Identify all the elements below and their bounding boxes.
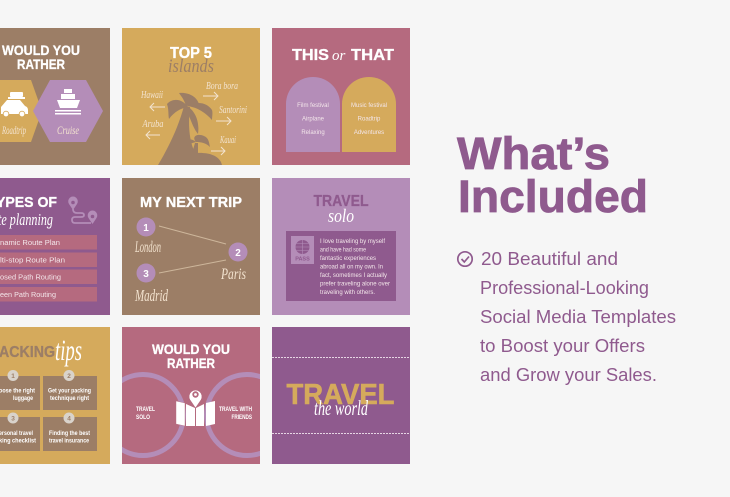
text box <box>286 231 396 301</box>
tip text: ersonal travel <box>0 431 33 437</box>
label: travel with friends: TRAVEL WITH <box>219 407 252 413</box>
labels: islands with arrows: Hawaii <box>140 90 163 101</box>
heading: would you rather: RATHER <box>167 356 215 371</box>
arch: this <box>286 77 340 152</box>
body text: and have had some <box>320 246 366 254</box>
icon: route pins <box>68 197 97 224</box>
heading: packing: ACKING <box>0 344 55 361</box>
panel: types of route planning <box>0 178 110 315</box>
tip numbers: 4 <box>67 416 71 422</box>
labels: islands with arrows: Kauai <box>219 135 236 146</box>
label: roadtrip: Roadtrip <box>1 123 26 137</box>
icon: passport: PASS <box>295 256 310 262</box>
list: that: Music festival <box>351 103 387 109</box>
label: london: London <box>134 239 161 256</box>
arch: that <box>342 77 396 152</box>
heading: what's included <box>457 128 648 222</box>
tip numbers: 3 <box>11 416 15 422</box>
heading: would you rather: WOULD YOU <box>152 342 230 357</box>
heading: would you rather <box>2 43 80 72</box>
text block: description: to Boost your Offers <box>480 336 645 356</box>
labels: islands with arrows: Aruba <box>142 119 164 130</box>
panel: this or that <box>272 28 410 165</box>
body text: traveling with others. <box>320 289 375 296</box>
list: route plans: osed Path Routing <box>0 274 61 282</box>
list: route plans: lti-stop Route Plan <box>0 258 65 264</box>
text block: description <box>480 249 676 385</box>
text block: description: Social Media Templates <box>480 307 676 327</box>
heading: my next trip: MY NEXT TRIP <box>140 194 242 211</box>
heading: travel: TRAVEL <box>286 379 394 411</box>
rings <box>122 372 260 458</box>
text block: description: 20 Beautiful and <box>481 249 618 269</box>
list: that: Adventures <box>354 130 384 136</box>
panel: my next trip <box>122 178 260 315</box>
label: madrid: Madrid <box>134 286 168 305</box>
heading: top 5: TOP 5 <box>170 45 212 62</box>
tip text: Finding the best <box>49 431 90 437</box>
heading: would you rather: RATHER <box>17 57 65 72</box>
label: travel with friends <box>219 407 252 421</box>
list: route plans: namic Route Plan <box>0 240 60 247</box>
labels: islands with arrows: Santorini <box>219 105 247 116</box>
list: that: Roadtrip <box>358 116 381 122</box>
list: route plans: een Path Routing <box>0 292 56 299</box>
icon: car <box>1 92 28 117</box>
heading: what's included: Included <box>458 171 648 222</box>
script: the world: the world <box>314 396 368 420</box>
script: solo: solo <box>328 206 354 227</box>
script: islands: islands <box>168 56 214 77</box>
body text: abroad all on my own. In <box>320 264 383 270</box>
heading: travel: TRAVEL <box>314 193 369 210</box>
body text <box>320 238 391 296</box>
label: travel solo: SOLO <box>136 415 150 421</box>
icon: ship <box>55 89 81 114</box>
list: that <box>351 103 387 136</box>
heading: this or that: or <box>332 48 346 64</box>
panel: would you rather roadtrip or cruise <box>0 28 110 165</box>
stop 3: 3 <box>143 269 149 280</box>
panel: travel solo <box>272 178 410 315</box>
label: cruise: Cruise <box>57 123 79 137</box>
body text: fantastic experiences <box>320 255 377 262</box>
tip numbers <box>8 370 74 424</box>
panel: top 5 islands <box>122 28 260 165</box>
tip numbers: 2 <box>67 373 71 380</box>
tip cards <box>0 376 97 451</box>
hexagon: roadtrip <box>0 80 42 142</box>
text block: description: and Grow your Sales. <box>480 365 657 385</box>
stop 1: 1 <box>143 223 149 234</box>
label: travel solo: TRAVEL <box>136 407 155 413</box>
label: travel with friends: FRIENDS <box>232 415 252 421</box>
hexagon: cruise <box>33 80 103 142</box>
heading: this or that: THAT <box>351 47 394 64</box>
text block: description: Professional-Looking <box>480 278 649 298</box>
script: route planning: te planning <box>0 210 53 229</box>
heading: what's included: What’s <box>457 128 610 179</box>
tip text: luggage <box>13 396 34 402</box>
stop 2: 2 <box>235 248 241 259</box>
heading: would you rather: WOULD YOU <box>2 43 80 58</box>
tip text: Get your packing <box>48 388 91 394</box>
panel: would you rather travel solo or with friends <box>122 327 260 464</box>
list: route plans <box>0 235 97 302</box>
tip text: travel insurance <box>49 438 90 444</box>
body text: fact, sometimes I actually <box>320 272 388 279</box>
panel: travel the world <box>272 327 410 464</box>
dashed lines <box>272 358 410 434</box>
list: this: Film festival <box>297 103 329 109</box>
tip text: king checklist <box>0 438 36 444</box>
list: this: Relaxing <box>301 130 325 136</box>
illustration: palm island <box>158 93 222 165</box>
heading: would you rather <box>152 342 230 371</box>
label: travel solo <box>136 407 155 421</box>
list: this <box>297 103 329 136</box>
icon: map with pin <box>176 390 215 426</box>
tip numbers: 1 <box>11 373 15 380</box>
label: paris: Paris <box>220 266 246 283</box>
heading: this or that: THIS <box>292 47 329 64</box>
labels: islands with arrows: Bora bora <box>206 81 238 92</box>
tip text: oose the right <box>0 388 35 394</box>
heading: this or that <box>292 47 394 64</box>
icon: check circle <box>458 252 472 266</box>
route lines <box>159 226 226 273</box>
tip text <box>0 388 91 444</box>
body text: prefer traveling alone over <box>320 280 391 288</box>
panel: packing tips <box>0 327 110 464</box>
body text: I love traveling by myself <box>320 238 385 245</box>
script: tips: tips <box>55 334 82 367</box>
tip text: technique right <box>50 396 89 402</box>
list: this: Airplane <box>302 116 325 122</box>
labels: islands with arrows <box>140 81 247 155</box>
